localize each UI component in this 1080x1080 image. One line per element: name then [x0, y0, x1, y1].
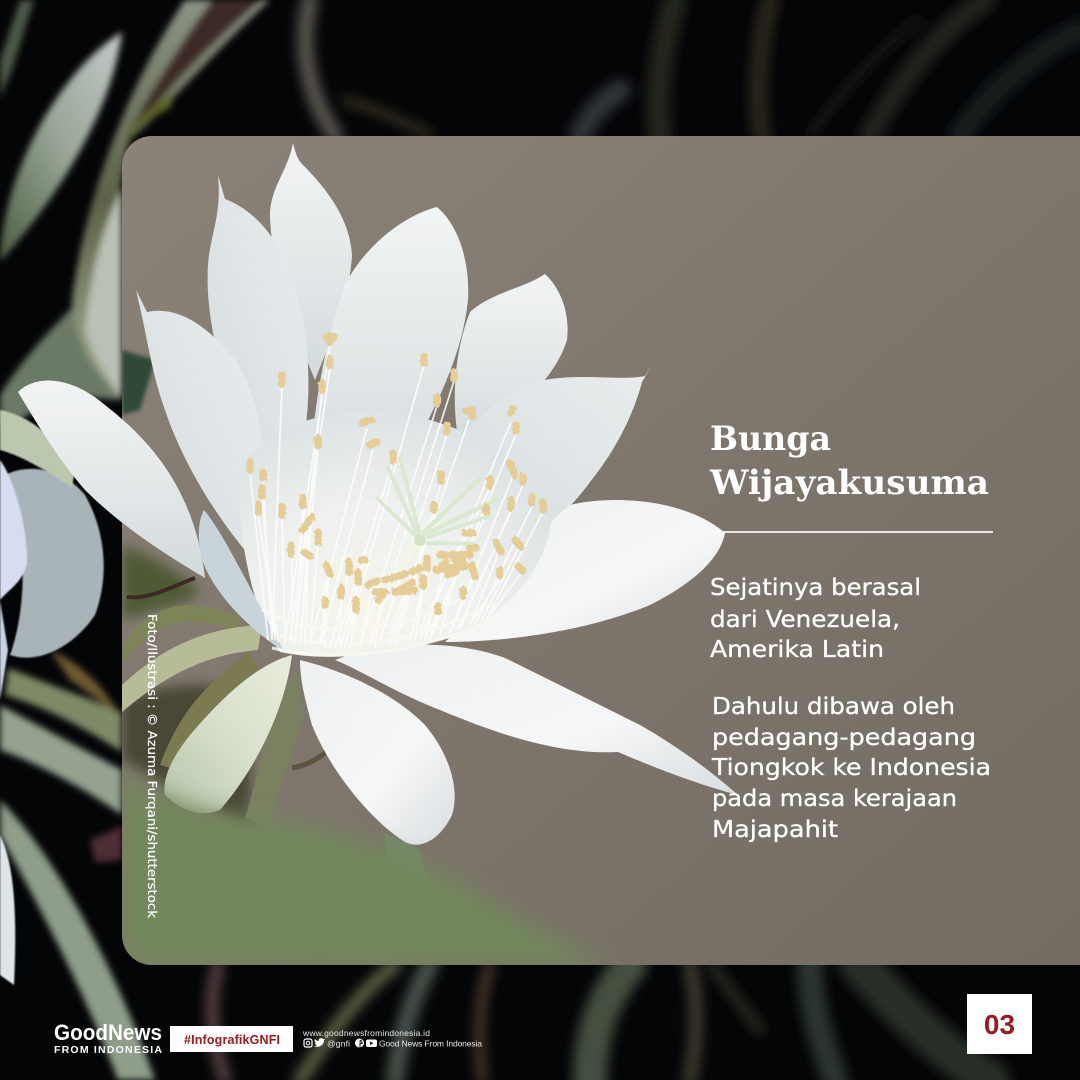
- website and social handles: @gnfi: [327, 1038, 350, 1048]
- logo: GoodNews From Indonesia: [54, 1020, 162, 1056]
- text block: history: pedagang-pedagang: [712, 723, 976, 751]
- website and social handles: www.goodnewsfromindonesia.id: [302, 1028, 430, 1038]
- pistil: green-white stigma: [377, 458, 497, 578]
- flower: white Wijayakusuma bloom: [18, 143, 738, 845]
- hashtag badge: #InfografikGNFI: [184, 1033, 280, 1047]
- petal: large centre: [310, 207, 468, 490]
- text block: history: Tiongkok ke Indonesia: [711, 753, 991, 781]
- petal: far left: [18, 381, 205, 578]
- filaments: stamen threads: [250, 345, 543, 648]
- text block: origin: dari Venezuela,: [710, 605, 900, 633]
- page number: 03: [984, 1009, 1015, 1040]
- text block: history: Dahulu dibawa oleh: [712, 692, 955, 720]
- website and social handles: Good News From Indonesia: [379, 1038, 482, 1048]
- photo credit: Foto/Ilustrasi : © Azuma Furqani/shutterstock: [145, 614, 160, 919]
- inner fold petal: [199, 510, 285, 652]
- anthers: yellow pollen: [250, 336, 543, 612]
- text block: origin: [710, 573, 921, 663]
- panel: translucent taupe card: [122, 136, 1080, 965]
- website and social handles: [302, 1028, 482, 1048]
- petal: upper right: [455, 274, 568, 450]
- text block: origin: Sejatinya berasal: [710, 573, 921, 601]
- text block: origin: Amerika Latin: [710, 635, 884, 663]
- left neighbouring flower: [0, 460, 104, 985]
- petal: lower long: [335, 645, 738, 795]
- title: [709, 419, 989, 502]
- text block: history: pada masa kerajaan: [712, 784, 957, 812]
- title: Bunga: [710, 419, 831, 458]
- stem connecting left flower: [0, 410, 75, 487]
- petal: long right: [445, 500, 725, 642]
- petal: left upper: [136, 290, 266, 570]
- hashtag badge: [170, 1026, 293, 1052]
- sepal: pale green: [164, 655, 292, 813]
- petal: upper left narrow: [208, 175, 308, 480]
- title: Wijayakusuma: [709, 463, 989, 502]
- text block: history: Majapahit: [712, 815, 838, 843]
- petal: top: [270, 143, 352, 380]
- page number: [967, 994, 1032, 1054]
- base arc of filaments: [262, 594, 510, 655]
- petal: bottom: [300, 660, 455, 845]
- logo: GoodNews From Indonesia: GoodNews: [54, 1020, 162, 1045]
- logo: GoodNews From Indonesia: FROM INDONESIA: [54, 1044, 162, 1056]
- centre: flower throat: [239, 412, 552, 657]
- blurred green foreground leaf: [122, 770, 610, 965]
- title divider: [712, 531, 993, 533]
- petal: right: [420, 365, 652, 540]
- stems and green parts behind the flower: [122, 350, 432, 900]
- text block: history: [711, 692, 991, 843]
